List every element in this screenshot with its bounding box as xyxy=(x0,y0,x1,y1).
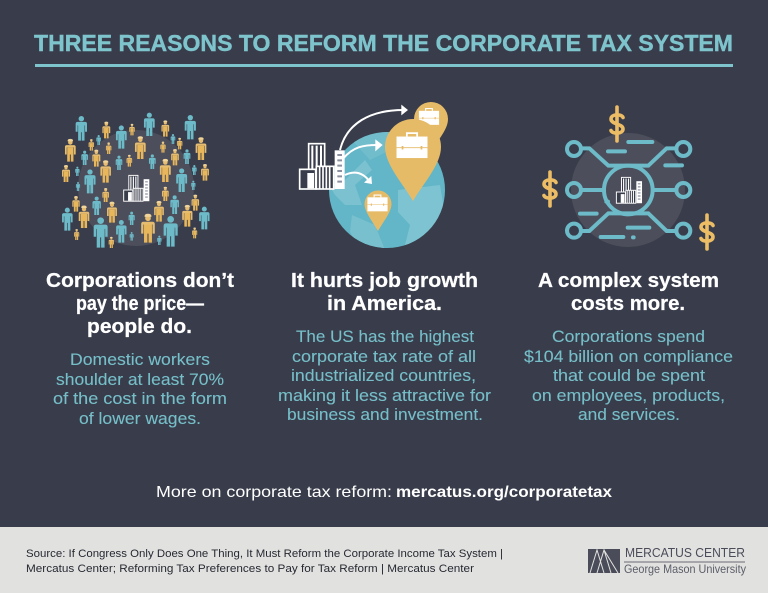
column 3 text: and services. xyxy=(578,406,680,424)
arrows xyxy=(340,105,408,184)
column 3 text xyxy=(524,328,733,424)
logo: Mercatus Center: MERCATUS CENTER xyxy=(625,546,745,560)
column 2 text: making it less attractive for xyxy=(278,387,492,405)
column 1 heading: pay the price— xyxy=(76,293,204,315)
column 2 heading: in America. xyxy=(327,293,442,315)
icon: complex circuit with dollar signs xyxy=(544,107,713,249)
column 2 heading: It hurts job growth xyxy=(291,270,478,292)
pin: main job xyxy=(385,119,441,201)
column 1 text: Domestic workers xyxy=(70,351,210,369)
column 3 text: that could be spent xyxy=(553,367,705,385)
call to action: More on corporate tax reform: xyxy=(156,484,392,501)
call to action xyxy=(156,484,612,501)
logo: Mercatus Center: George Mason University xyxy=(624,562,746,576)
column 1 heading: Corporations don’t xyxy=(46,270,234,292)
column 2 text: The US has the highest xyxy=(296,328,474,346)
call to action: mercatus.org/corporatetax xyxy=(396,484,612,501)
column 3 heading: costs more. xyxy=(571,293,685,315)
icon: globe with job pins and arrows xyxy=(300,102,448,250)
column 1 text: of lower wages. xyxy=(79,410,201,428)
column 3 text: Corporations spend xyxy=(552,328,705,346)
column 3 text: $104 billion on compliance xyxy=(524,348,733,366)
source text xyxy=(26,548,503,575)
column 1 text: of the cost in the form xyxy=(53,390,227,408)
column 3 heading: A complex system xyxy=(538,270,719,292)
pin: far job xyxy=(414,102,448,151)
source text: Source: If Congress Only Does One Thing, It Must Reform the Corporate Income Tax System | xyxy=(26,548,503,560)
column 1 heading: people do. xyxy=(87,316,192,338)
column 2 heading xyxy=(291,270,478,315)
column 3 text: on employees, products, xyxy=(532,387,725,405)
column 1 text xyxy=(53,351,227,428)
column 2 text: industrialized countries, xyxy=(291,367,476,385)
pin: small job xyxy=(364,190,392,231)
footer panel xyxy=(0,527,768,593)
source text: Mercatus Center; Reforming Tax Preferences to Pay for Tax Reform | Mercatus Center xyxy=(26,563,474,575)
column 2 text xyxy=(278,328,492,424)
icon: crowd of workers around a company xyxy=(62,113,210,248)
title: THREE REASONS TO REFORM THE CORPORATE TAX SYSTEM xyxy=(34,30,733,56)
column 2 text: business and investment. xyxy=(287,406,483,424)
column 3 heading xyxy=(538,270,719,315)
logo: Mercatus Center xyxy=(588,546,746,576)
column 1 heading xyxy=(46,270,234,338)
column 2 text: corporate tax rate of all xyxy=(292,348,476,366)
column 1 text: shoulder at least 70% xyxy=(56,371,224,389)
